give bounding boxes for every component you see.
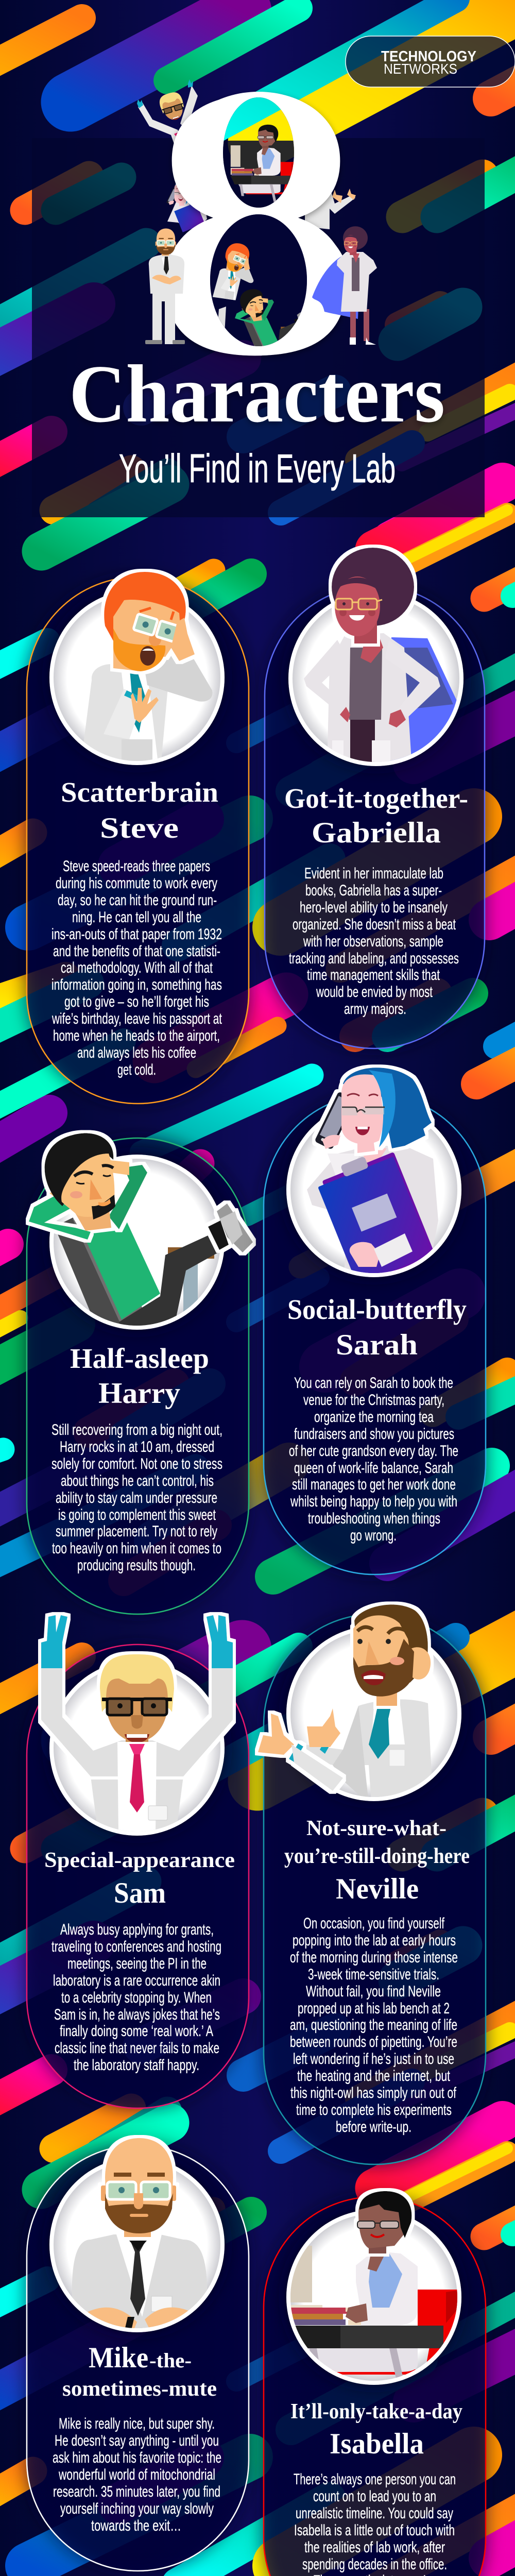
description: finally doing some ‘real work.’ A — [60, 2023, 213, 2040]
description: organize the morning tea — [314, 1409, 434, 1426]
heading: Not-sure-what- — [306, 1817, 447, 1840]
logo badge: TECHNOLOGY — [381, 48, 476, 65]
description: ability to stay calm under pressure — [56, 1489, 217, 1506]
heading: Steve — [100, 812, 179, 844]
logo badge — [346, 36, 515, 87]
description: go wrong. — [350, 1527, 397, 1544]
description: ask him about his favorite topic: the — [53, 2449, 221, 2466]
description — [53, 2415, 221, 2534]
description: spending decades in the office. — [302, 2556, 447, 2573]
portrait: Sam — [41, 1615, 233, 1836]
description: day, so he can hit the ground run- — [58, 892, 217, 909]
description — [52, 1421, 222, 1574]
heading — [287, 1294, 467, 1361]
description: is going to complement this sweet — [58, 1506, 216, 1523]
description: the heating and the internet, but — [297, 2067, 450, 2084]
character: Sarah, small — [166, 180, 207, 232]
heading — [284, 783, 468, 849]
description: yourself inching your way slowly — [60, 2500, 214, 2517]
heading — [284, 1817, 470, 1905]
portrait: Neville — [258, 1605, 461, 1804]
description: propped up at his lab bench at 2 — [298, 2000, 450, 2017]
heading: Half-asleep — [70, 1343, 209, 1374]
description: Without fail, you find Neville — [306, 1983, 441, 2000]
description: laboratory is a rare occurrence akin — [53, 1972, 220, 1989]
description: ins-an-outs of that paper from 1932 — [52, 926, 222, 943]
description: cal methodology. With all of that — [61, 959, 213, 976]
heading: Social-butterfly — [287, 1294, 467, 1325]
description: Harry rocks in at 10 am, dressed — [60, 1438, 214, 1455]
upper window of the 8: Isabella at her desk — [223, 97, 294, 208]
description — [290, 1915, 458, 2136]
description — [52, 858, 222, 1078]
heading: Sam — [114, 1877, 166, 1909]
heading: Gabriella — [312, 817, 441, 849]
description: meetings, seeing the PI in the — [67, 1955, 207, 1972]
heading: Special-appearance — [44, 1849, 235, 1872]
description: wife’s birthday, leave his passport at — [52, 1010, 222, 1027]
description: and always lets his coffee — [77, 1044, 196, 1061]
description — [289, 1375, 458, 1544]
description: Sam is in, he always jokes that he’s — [54, 2006, 220, 2023]
heading: Sarah — [336, 1329, 418, 1361]
character: Neville, small — [302, 156, 356, 229]
description: summer placement. Try not to rely — [56, 1523, 217, 1540]
description: hero-level ability to be insanely — [300, 899, 448, 916]
panel: Social-butterfly Sarah — [264, 1067, 486, 1574]
description: would be envied by most — [316, 984, 433, 1001]
description: Evident in her immaculate lab — [304, 865, 443, 882]
description: got to give – so he’ll forget his — [64, 993, 209, 1010]
description — [294, 2471, 456, 2576]
description: too heavily on him when it comes to — [52, 1540, 221, 1557]
portrait: Harry — [29, 1133, 253, 1340]
heading: -the- — [149, 2349, 192, 2372]
title: Characters: Characters — [69, 348, 445, 439]
character: Gabriella, small — [312, 226, 377, 345]
character: Sam waving, small — [137, 79, 198, 149]
description: with her observations, sample — [303, 933, 443, 950]
portrait: Gabriella — [288, 548, 464, 769]
description: towards the exit… — [91, 2517, 181, 2534]
description: Steve speed-reads three papers — [63, 858, 210, 875]
heading: sometimes-mute — [62, 2377, 217, 2401]
panel: Half-asleep Harry — [27, 1133, 253, 1614]
heading: you’re-still-doing-here — [284, 1844, 470, 1868]
heading — [290, 2400, 462, 2460]
character: Mike, small — [145, 228, 185, 344]
heading: It’ll-only-take-a-day — [290, 2400, 462, 2424]
description: Always busy applying for grants, — [60, 1921, 214, 1938]
heading: Got-it-together- — [284, 783, 468, 814]
description: time management skills that — [307, 967, 440, 984]
description: traveling to conferences and hosting — [52, 1938, 221, 1955]
description: get cold. — [117, 1061, 156, 1078]
heading: Neville — [336, 1873, 419, 1905]
description: army majors. — [344, 1001, 406, 1018]
heading — [62, 2342, 217, 2401]
lower window of the 8: Steve and Harry — [210, 214, 307, 346]
description: classic line that never fails to make — [55, 2040, 219, 2057]
numeral 8: 8 — [151, 7, 360, 435]
heading — [70, 1343, 209, 1410]
description: On occasion, you find yourself — [303, 1915, 444, 1932]
panel: Scatterbrain Steve — [27, 572, 249, 1104]
panel: Special-appearance Sam — [27, 1615, 249, 2108]
description: books, Gabriella has a super- — [305, 882, 442, 899]
portrait: Mike — [49, 2138, 225, 2335]
description: solely for comfort. Not one to stress — [52, 1455, 222, 1472]
panel: It'll-only-take-a-day Isabella — [264, 2191, 486, 2576]
portrait: Steve — [49, 572, 225, 768]
panel: Mike-the-sometimes-mute — [27, 2138, 249, 2571]
description: producing results though. — [77, 1557, 196, 1574]
panel: Got-it-together-Gabriella — [265, 548, 485, 1048]
description: count on to lead you to an — [313, 2488, 436, 2505]
description: troubleshooting when things — [308, 1510, 440, 1527]
description: during his commute to work every — [56, 875, 217, 892]
description: and the benefits of that one statisti- — [53, 943, 220, 960]
description: to a celebrity stopping by. When — [61, 1989, 212, 2006]
heading: Scatterbrain — [61, 776, 218, 808]
panel: Not-sure-what-you're-still-doing-here Neville — [258, 1605, 486, 2164]
description: research. 35 minutes later, you find — [53, 2483, 220, 2500]
description: about things he can’t control, his — [61, 1472, 214, 1489]
description: Mike is really nice, but super shy. — [59, 2415, 215, 2432]
description: venue for the Christmas party, — [303, 1392, 444, 1409]
hero illustration: number 8 with characters — [73, 79, 377, 420]
heading: Isabella — [330, 2428, 424, 2460]
portrait: Isabella — [286, 2191, 462, 2395]
description: Still recovering from a big night out, — [52, 1421, 222, 1438]
heading: Mike — [89, 2342, 148, 2374]
description: home when he heads to the airport, — [53, 1027, 220, 1044]
heading: Harry — [98, 1377, 180, 1410]
description: wonderful world of mitochondrial — [58, 2466, 215, 2483]
description — [52, 1921, 221, 2074]
heading — [61, 776, 218, 844]
heading — [44, 1849, 235, 1909]
description — [289, 865, 459, 1018]
description: He doesn’t say anything - until you — [55, 2432, 219, 2449]
description: before write-up. — [336, 2119, 411, 2136]
portrait: Sarah — [286, 1067, 461, 1293]
description: the realities of lab work, after — [304, 2539, 445, 2556]
description: 3-week time-sensitive trials. — [308, 1966, 439, 1983]
description: the laboratory staff happy. — [74, 2057, 199, 2074]
description: ning. He can tell you all the — [72, 909, 201, 926]
description: information going in, something has — [52, 976, 222, 993]
logo badge: NETWORKS — [384, 61, 457, 77]
